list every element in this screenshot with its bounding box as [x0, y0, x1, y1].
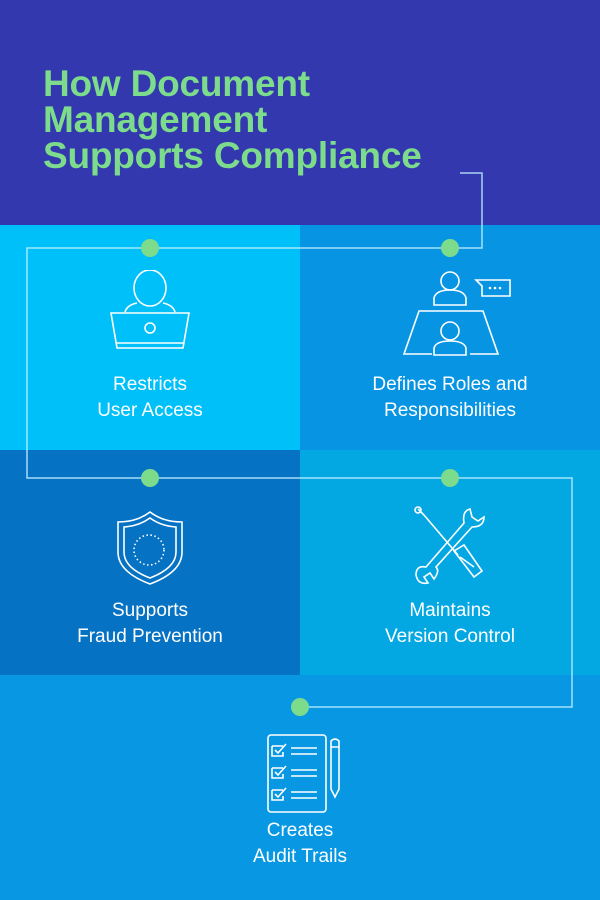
icon: checklist with pen [267, 734, 340, 813]
icon: roles meeting [402, 271, 511, 356]
label: fraud prevention: Supports [112, 600, 188, 621]
title: Management [43, 99, 267, 140]
label: restricts user access [97, 374, 203, 421]
label: fraud prevention [77, 600, 223, 647]
label: defines roles: Defines Roles and [372, 374, 528, 395]
panel: restricts access [0, 225, 300, 450]
label: version control [385, 600, 515, 647]
panel: roles [300, 225, 600, 450]
icon: user at laptop [110, 270, 190, 349]
label: version control: Maintains [409, 600, 491, 621]
label: audit trails: Creates [267, 820, 333, 841]
icon: shield [117, 511, 183, 585]
label: restricts user access: User Access [97, 400, 203, 421]
title: Supports Compliance [43, 135, 422, 176]
label: defines roles [372, 374, 528, 421]
label: version control: Version Control [385, 626, 515, 647]
title [43, 63, 422, 176]
title: How Document [43, 63, 310, 104]
panel: version [300, 450, 600, 675]
label: restricts user access: Restricts [113, 374, 187, 395]
icon: tools [414, 506, 485, 584]
label: audit trails: Audit Trails [253, 846, 347, 867]
label: fraud prevention: Fraud Prevention [77, 626, 223, 647]
header panel [0, 0, 600, 225]
label: audit trails [253, 820, 347, 867]
panel: fraud [0, 450, 300, 675]
label: defines roles: Responsibilities [384, 400, 516, 421]
